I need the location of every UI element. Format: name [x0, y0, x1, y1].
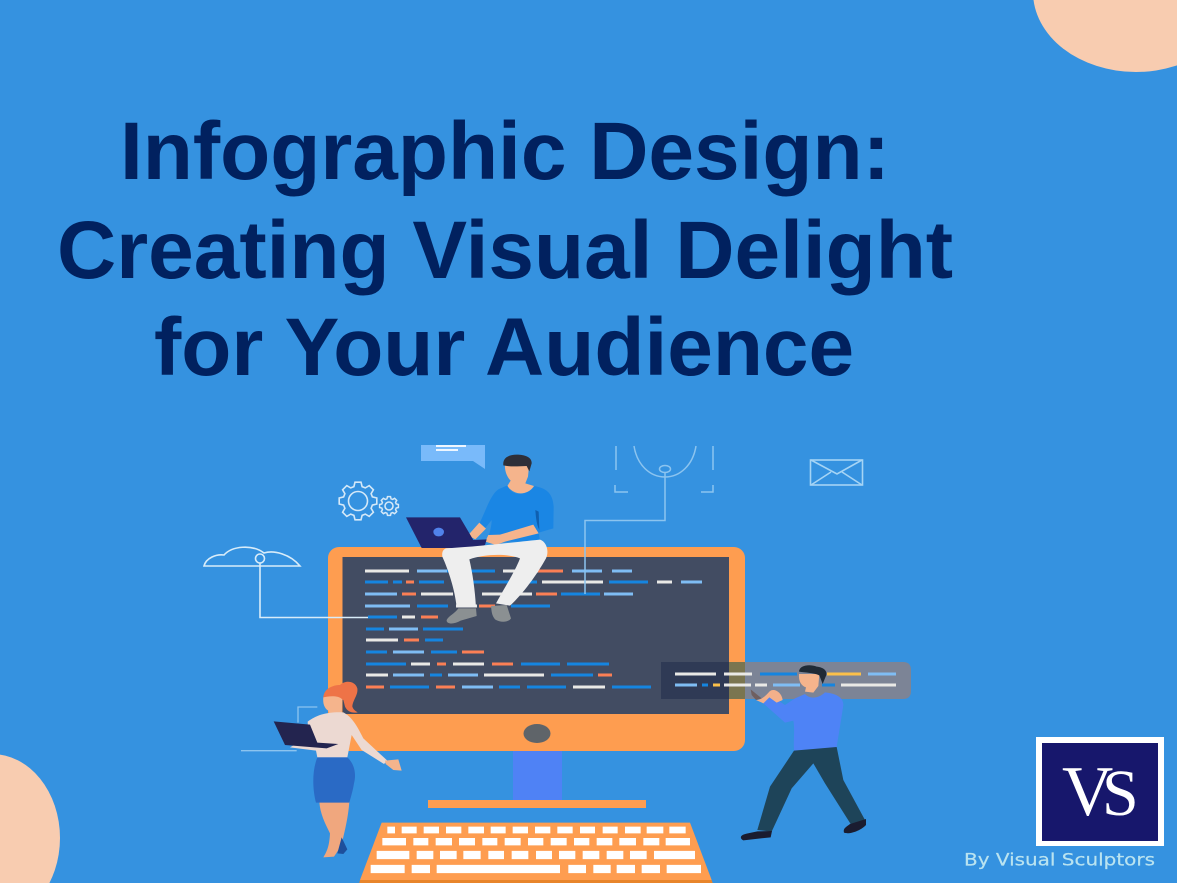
- keyboard: [359, 823, 713, 883]
- trousers: [442, 540, 547, 607]
- title line 2: Creating Visual Delight: [57, 205, 953, 296]
- monitor frame: [328, 547, 745, 751]
- code lines on screen: [365, 571, 702, 687]
- logo letter S: S: [1102, 757, 1139, 830]
- laptop: [406, 517, 487, 548]
- person: man in blue sweater walking: [741, 665, 866, 840]
- monitor stand: [513, 751, 562, 800]
- laptop: [274, 721, 338, 748]
- person: woman with laptop: [241, 682, 402, 857]
- legs: [319, 802, 349, 857]
- neck and face: [799, 674, 819, 693]
- icon: gears: [339, 482, 398, 520]
- icon: speech bubble: [421, 445, 485, 469]
- monitor screen: [342, 557, 729, 714]
- arms: [468, 523, 539, 545]
- hair: [323, 682, 358, 713]
- decorative blob: top right: [1033, 0, 1177, 72]
- floating code panel: [661, 662, 911, 699]
- webcam button: [524, 724, 550, 743]
- connector lines behind woman: [241, 707, 317, 751]
- hair: [799, 665, 826, 684]
- icon: cloud: [204, 547, 300, 566]
- icon: envelope: [810, 460, 862, 485]
- icon: antenna: [615, 446, 713, 492]
- hand: [385, 759, 402, 771]
- sweater: [763, 692, 843, 751]
- skirt: [313, 757, 355, 803]
- blouse and arm: [290, 712, 387, 764]
- title: [57, 106, 953, 393]
- face: [323, 696, 342, 715]
- shoes: [741, 819, 866, 840]
- shirt: [479, 485, 554, 542]
- decorative blob: bottom left: [0, 754, 60, 883]
- title line 3: for Your Audience: [154, 302, 854, 393]
- person: man sitting on monitor with laptop: [406, 455, 554, 623]
- logo badge: [1036, 737, 1164, 846]
- logo letter V: V: [1062, 753, 1113, 831]
- antenna connector line: [585, 473, 665, 594]
- monitor base: [428, 800, 646, 808]
- title line 1: Infographic Design:: [120, 106, 890, 197]
- hands: [756, 690, 783, 703]
- monitor: [328, 547, 745, 808]
- byline: By Visual Sculptors: [964, 850, 1155, 870]
- cloud connector line: [260, 563, 368, 618]
- hair: [503, 455, 532, 471]
- neck and head: [505, 463, 534, 493]
- trousers: [757, 747, 865, 832]
- shoes: [447, 605, 511, 623]
